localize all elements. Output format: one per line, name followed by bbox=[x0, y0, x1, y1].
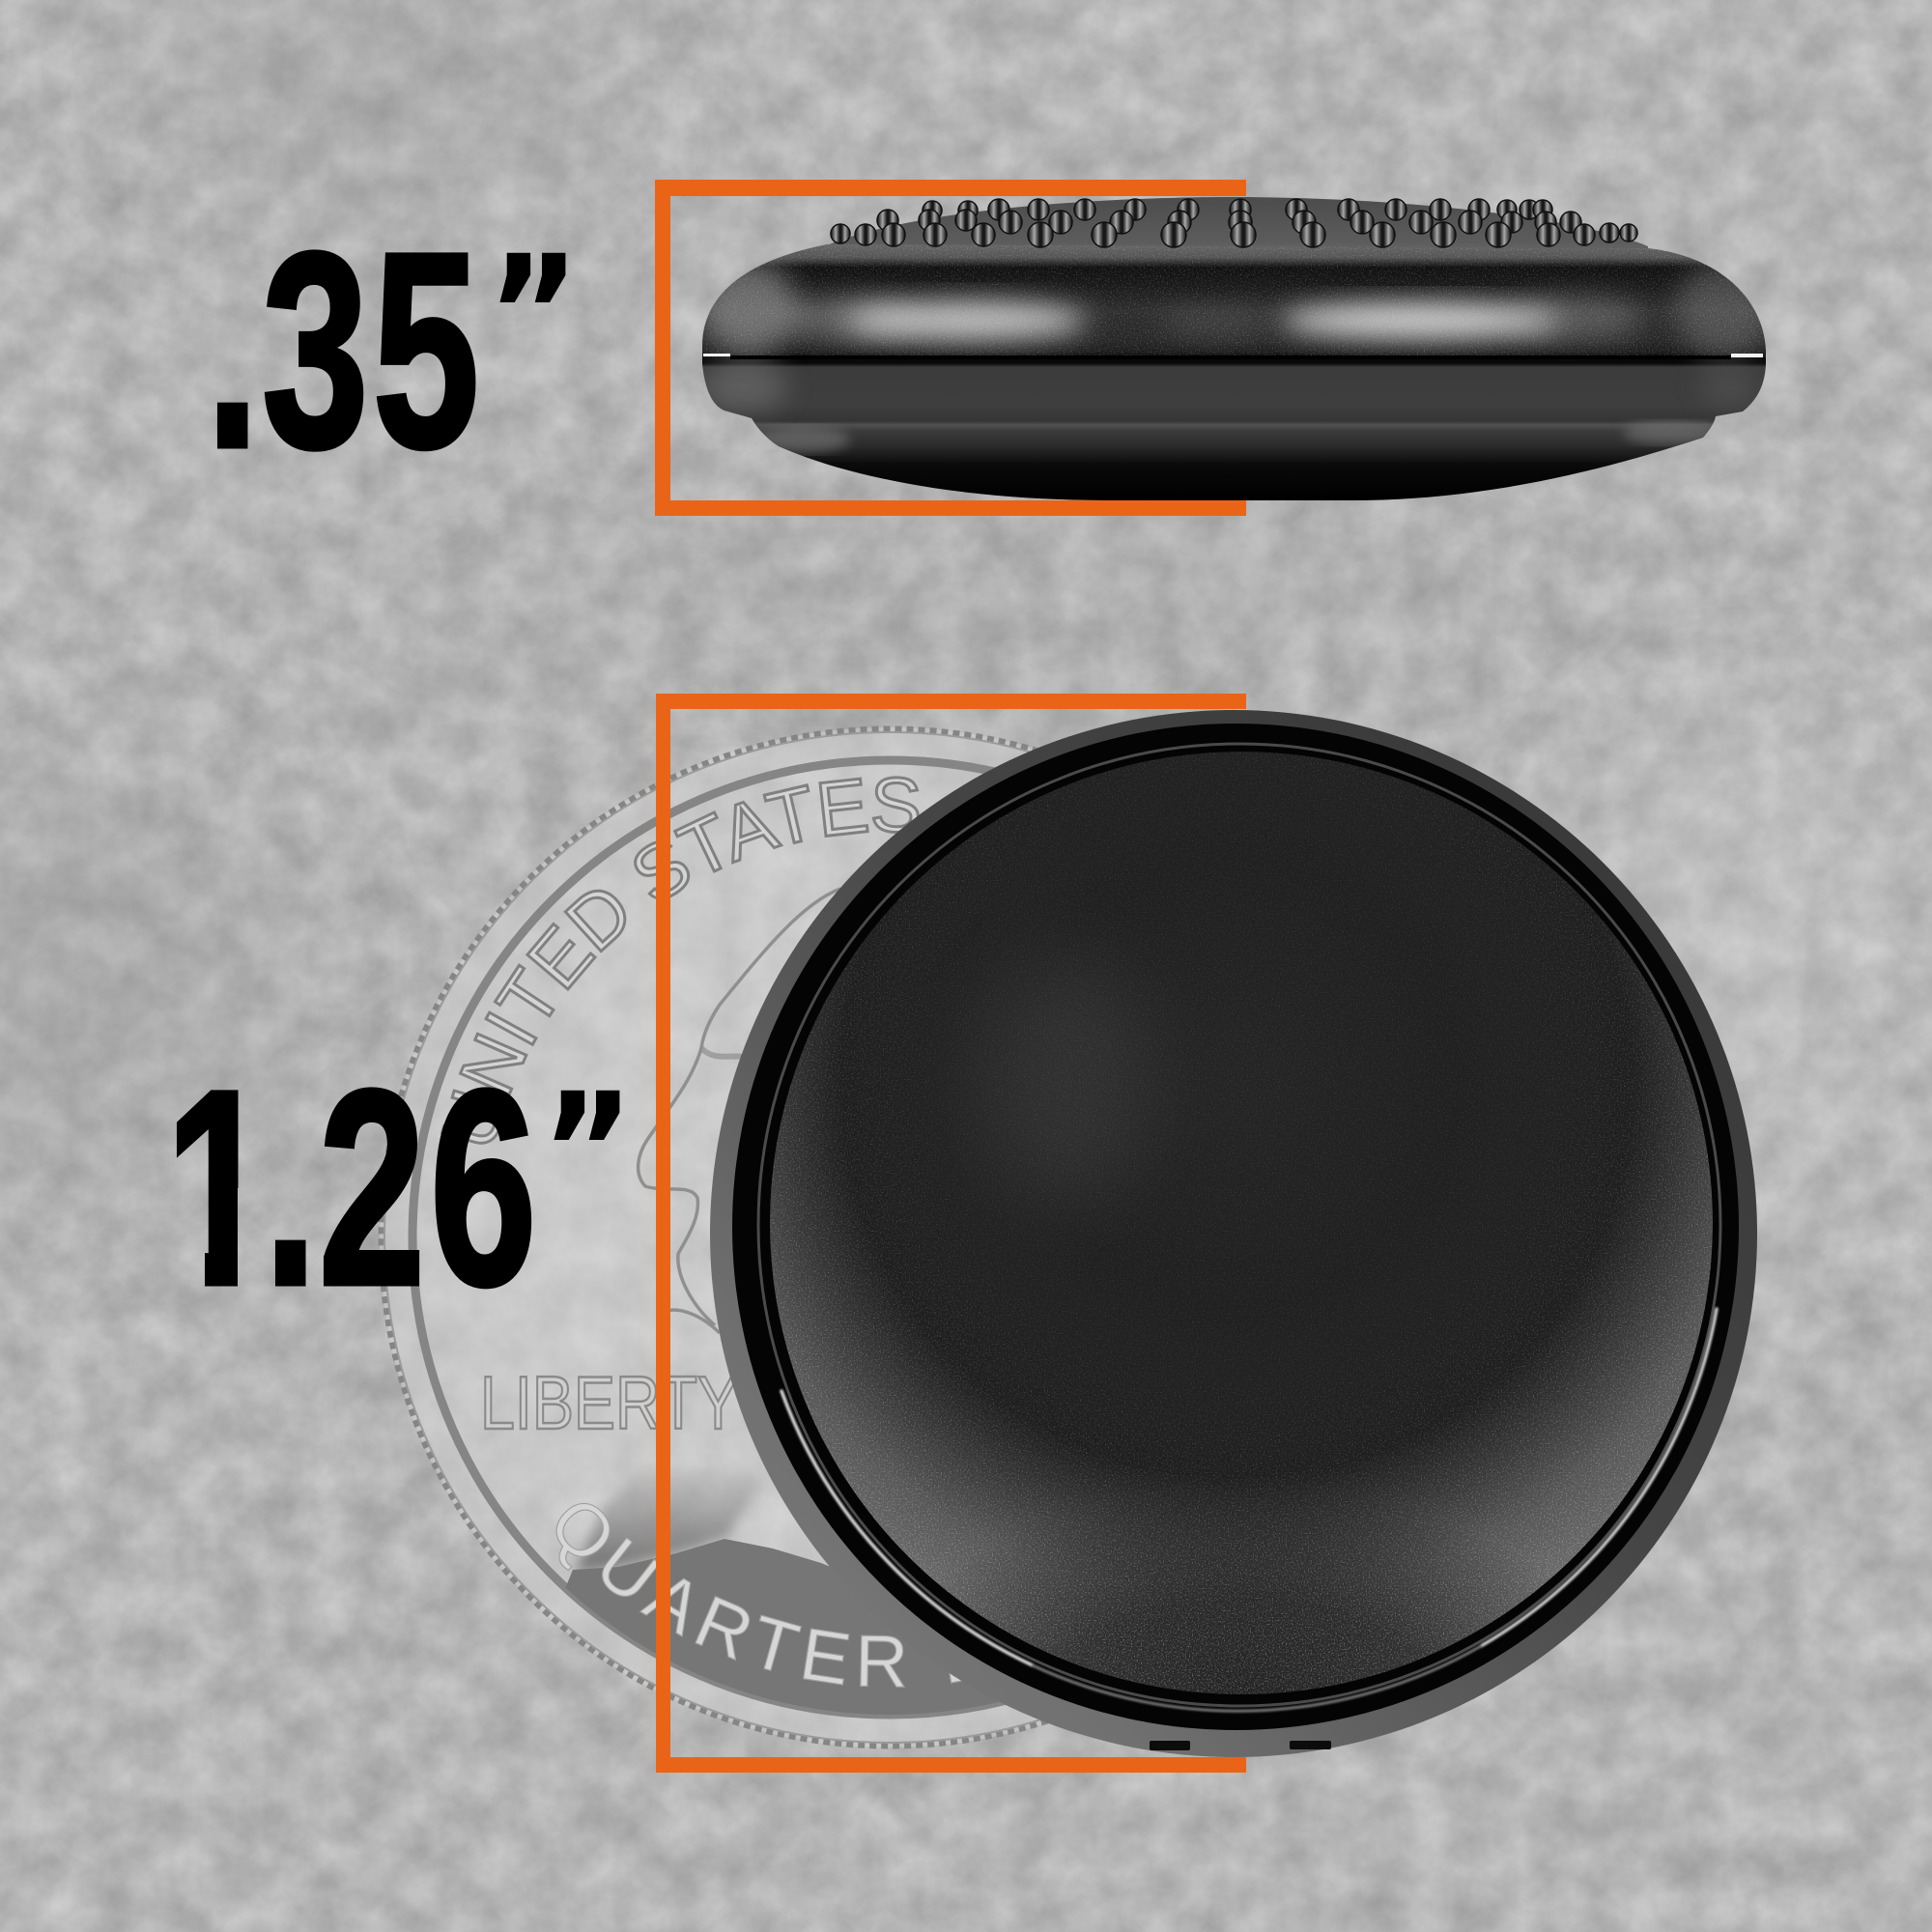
product side view bbox=[696, 197, 1773, 502]
coin text: LIBERTY: LIBERTY bbox=[480, 1360, 739, 1445]
bottom notches bbox=[1150, 1741, 1331, 1750]
measurement label: 1.26 inch: ” bbox=[541, 1059, 635, 1244]
seam highlights bbox=[703, 354, 1763, 359]
body bbox=[696, 242, 1773, 502]
measurement label: 1.26 inch: .26 bbox=[264, 1033, 537, 1344]
measurement label: .35 inch: ” bbox=[487, 221, 581, 407]
quarter coin behind the product bbox=[379, 726, 1049, 1748]
product top view bbox=[710, 710, 1757, 1757]
coin text: UNITED STATES: UNITED STATES bbox=[440, 776, 920, 1145]
coin portrait shadow bbox=[575, 1449, 765, 1573]
coin portrait outline bbox=[639, 889, 840, 1333]
raised tactile dots bbox=[831, 199, 1637, 247]
textured face bbox=[770, 752, 1713, 1694]
coin band under the bust bbox=[566, 1539, 999, 1715]
orange bracket: thickness bbox=[655, 180, 1246, 516]
measurement label: .35 inch: .35 bbox=[206, 195, 479, 506]
top plate bbox=[827, 197, 1648, 261]
gloss highlights bbox=[781, 1309, 1717, 1711]
outer rim bbox=[710, 710, 1757, 1757]
measurement label: 1.26 inch bbox=[176, 1087, 620, 1289]
orange bracket: diameter bbox=[656, 694, 1246, 1773]
inner ring bbox=[758, 744, 1720, 1706]
measurement label: 1.26 inch: 1 bbox=[165, 1033, 272, 1344]
black channel bbox=[732, 724, 1739, 1730]
coin body and reeded edge bbox=[380, 727, 1400, 1747]
coin text: QUARTER DOLLAR: QUARTER DOLLAR bbox=[556, 1503, 962, 1688]
